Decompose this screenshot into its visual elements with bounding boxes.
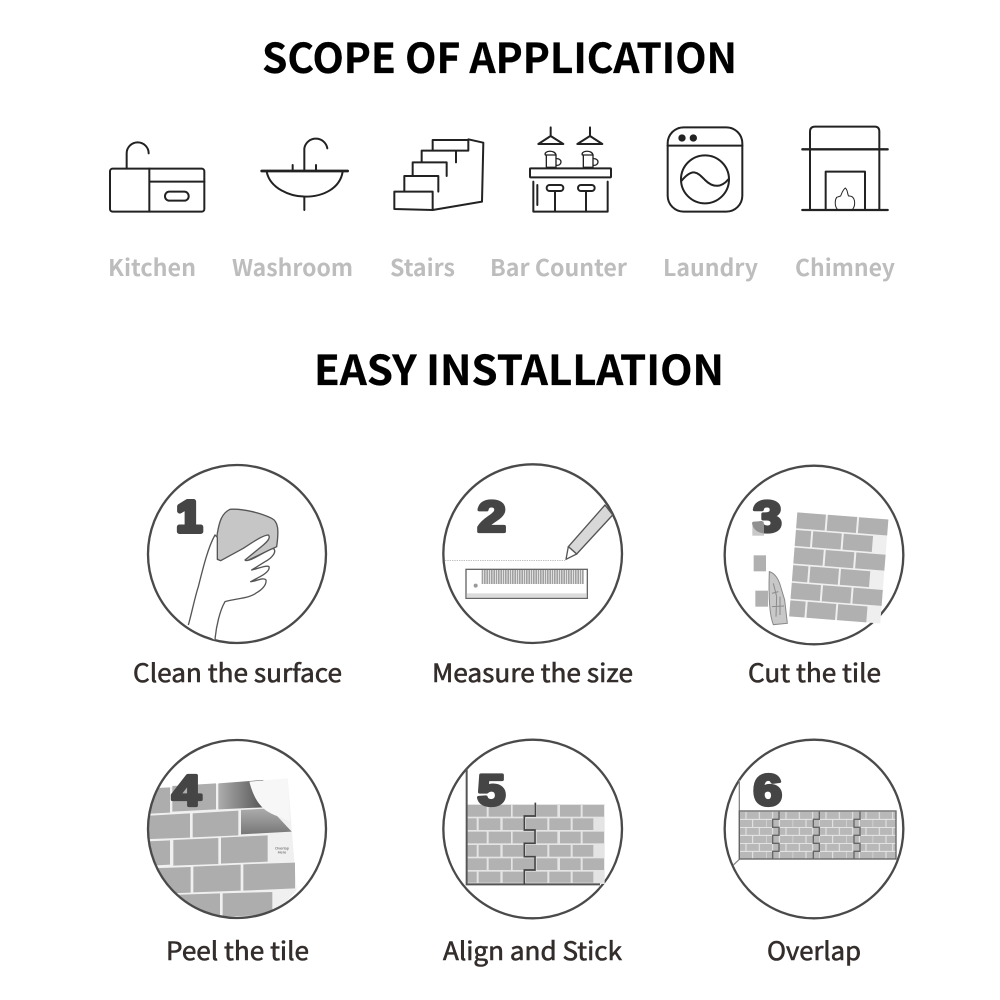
icon: washroom (262, 139, 348, 210)
step label: align and stick: Align and Stick (443, 932, 622, 968)
overlap seams (773, 812, 860, 859)
tiled strip (739, 811, 896, 859)
title: scope of application: SCOPE OF APPLICATION (262, 25, 737, 85)
step 3: cut the tile (725, 466, 903, 644)
step 1: clean the surface (148, 465, 326, 643)
number 3: 3 (753, 494, 782, 542)
number 2: 2 (477, 494, 506, 542)
peeled corner (249, 778, 290, 822)
icon: kitchen (110, 142, 204, 212)
tile rows (468, 805, 604, 883)
cut tile pieces (752, 522, 768, 607)
label: Kitchen: Kitchen (108, 249, 196, 283)
tile sheet backing (468, 804, 605, 884)
icon row left: kitchen, washroom, stairs (110, 139, 483, 212)
wall corner lines (467, 768, 600, 884)
overlap seam (524, 803, 535, 884)
step 4: peel the tile (143, 740, 326, 923)
dotted measuring line (445, 559, 566, 561)
number 4: 4 (172, 768, 201, 816)
icon: chimney (802, 127, 888, 210)
step label: clean the surface: Clean the surface (133, 654, 342, 690)
label: Washroom: Washroom (232, 249, 353, 283)
title: easy installation: EASY INSTALLATION (314, 337, 724, 397)
step circle (725, 466, 903, 644)
step circle (443, 464, 622, 643)
number 5: 5 (477, 767, 505, 815)
step label: overlap: Overlap (767, 932, 861, 968)
ruler (466, 569, 587, 598)
overlap note: Here (278, 850, 287, 855)
icon: stairs (394, 139, 483, 210)
wall corner (733, 780, 739, 865)
hand (188, 535, 275, 640)
step 2: measure the size (443, 464, 622, 643)
overlap note: Overlap (275, 845, 289, 850)
label: Chimney: Chimney (795, 249, 895, 283)
step label: cut the tile: Cut the tile (748, 654, 881, 690)
step circle (443, 740, 622, 918)
label: Bar Counter: Bar Counter (490, 249, 628, 283)
pencil (566, 505, 613, 559)
icon row right: bar counter, laundry, chimney (530, 127, 888, 212)
tile sheet (789, 512, 888, 624)
step label: peel the tile: Peel the tile (166, 932, 309, 968)
icon: bar counter (530, 127, 611, 212)
icon: laundry (668, 127, 742, 212)
sponge (216, 509, 278, 562)
label: Stairs: Stairs (390, 249, 455, 283)
step circle (148, 740, 326, 918)
number 1: 1 (177, 494, 202, 542)
utility knife (769, 572, 787, 625)
tile wall (143, 778, 297, 923)
step 6: overlap (725, 740, 903, 918)
step circle (725, 740, 903, 918)
step 5: align and stick (443, 740, 622, 918)
step label: measure the size: Measure the size (432, 654, 633, 690)
step circle (148, 465, 326, 643)
number 6: 6 (753, 767, 782, 815)
label: Laundry: Laundry (663, 249, 758, 283)
